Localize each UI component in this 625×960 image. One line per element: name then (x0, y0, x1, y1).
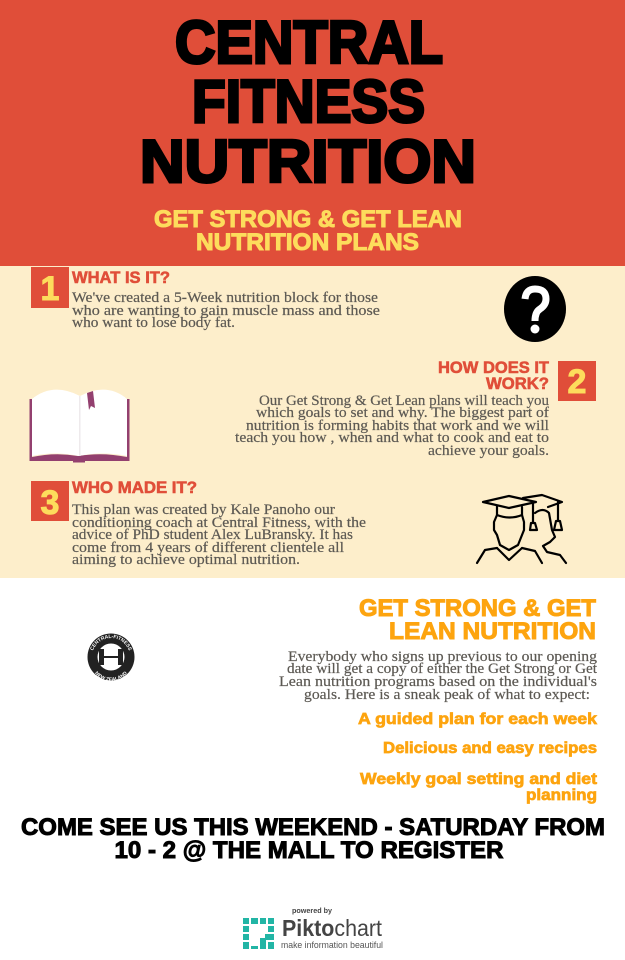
number badge 1 (31, 267, 69, 308)
heading: who made it: WHO MADE IT? (72, 478, 197, 497)
call to action (21, 814, 605, 864)
list of benefits: Delicious and easy recipes (383, 740, 597, 757)
tagline: make information beautiful (281, 940, 383, 950)
text: what is it (72, 290, 380, 331)
text: how does it work: teach you how , when and what to cook and eat to (235, 430, 549, 446)
heading: get strong and get lean nutrition: LEAN NUTRITION (389, 618, 596, 645)
text: what is it: We've created a 5-Week nutrition block for those (72, 290, 378, 306)
text: how does it work: Our Get Strong & Get Lean plans will teach you (259, 393, 549, 409)
text: intro: Everybody who signs up previous to our opening (288, 649, 598, 665)
text: who made it (72, 502, 366, 568)
number badge 3: 3 (41, 484, 59, 522)
call to action: 10 - 2 @ THE MALL TO REGISTER (114, 837, 504, 864)
subtitle: NUTRITION PLANS (196, 229, 419, 256)
section 1: what is it (31, 267, 566, 342)
icon: graduates (477, 495, 566, 563)
text: intro: date will get a copy of either the Get Strong or Get (287, 661, 598, 677)
footer: Piktochart (243, 906, 383, 950)
logo: Central Fitness: CENTRAL-FITNESS (90, 634, 132, 650)
text: intro (279, 649, 598, 703)
text: how does it work: achieve your goals. (428, 443, 549, 459)
call to action: COME SEE US THIS WEEKEND - SATURDAY FROM (21, 814, 605, 841)
panel: nutrition programs (88, 595, 598, 804)
heading: get strong and get lean nutrition: GET STRONG & GET (359, 595, 596, 622)
icon: open book (30, 390, 130, 462)
list of benefits: Weekly goal setting and diet (360, 771, 598, 788)
logo: Central Fitness: NEW ZEALAND (94, 671, 126, 680)
text: intro: Lean nutrition programs based on the individual's (279, 674, 597, 690)
text: how does it work (235, 393, 549, 459)
title: NUTRITION (140, 128, 476, 195)
text: what is it: who want to lose body fat. (72, 315, 235, 331)
text: who made it: advice of PhD student Alex LuBransky. It has (72, 527, 353, 543)
wordmark: Piktochart (282, 915, 383, 941)
heading: how does it work: HOW DOES IT (438, 358, 550, 377)
text: who made it: come from 4 years of different clientele all (72, 540, 344, 556)
text: who made it: This plan was created by Kale Panoho our (72, 502, 335, 518)
subtitle: GET STRONG & GET LEAN (154, 206, 462, 233)
list of benefits: A guided plan for each week (358, 711, 597, 728)
section 2: how does it work (30, 358, 596, 462)
title (140, 9, 476, 195)
powered by: powered by (292, 906, 333, 915)
text: how does it work: which goals to set and why. The biggest part of (256, 405, 549, 421)
text: intro: goals. Here is a sneak peak of what to expect: (304, 687, 590, 703)
heading: get strong and get lean nutrition (359, 595, 596, 645)
list of benefits (358, 711, 598, 804)
section 3: who made it (31, 478, 566, 568)
panel: questions (0, 266, 625, 578)
logo: Central Fitness (88, 634, 134, 680)
heading: how does it work: WORK? (486, 374, 549, 393)
text: who made it: aiming to achieve optimal nutrition. (72, 552, 300, 568)
title: CENTRAL (175, 9, 443, 76)
list of benefits: planning (526, 787, 597, 804)
number badge 1: 1 (41, 270, 59, 308)
number badge 3 (31, 481, 69, 522)
icon: Piktochart logo (243, 918, 274, 949)
text: who made it: conditioning coach at Central Fitness, with the (72, 515, 366, 531)
subtitle (154, 206, 462, 256)
icon: question mark (504, 276, 566, 342)
panel: header (0, 0, 625, 266)
number badge 2 (558, 361, 596, 401)
heading: how does it work (438, 358, 550, 393)
text: what is it: who are wanting to gain muscle mass and those (72, 303, 380, 319)
text: how does it work: nutrition is forming habits that work and we will (246, 418, 549, 434)
title: FITNESS (192, 68, 425, 135)
heading: what is it: WHAT IS IT? (72, 268, 170, 287)
number badge 2: 2 (568, 363, 586, 401)
